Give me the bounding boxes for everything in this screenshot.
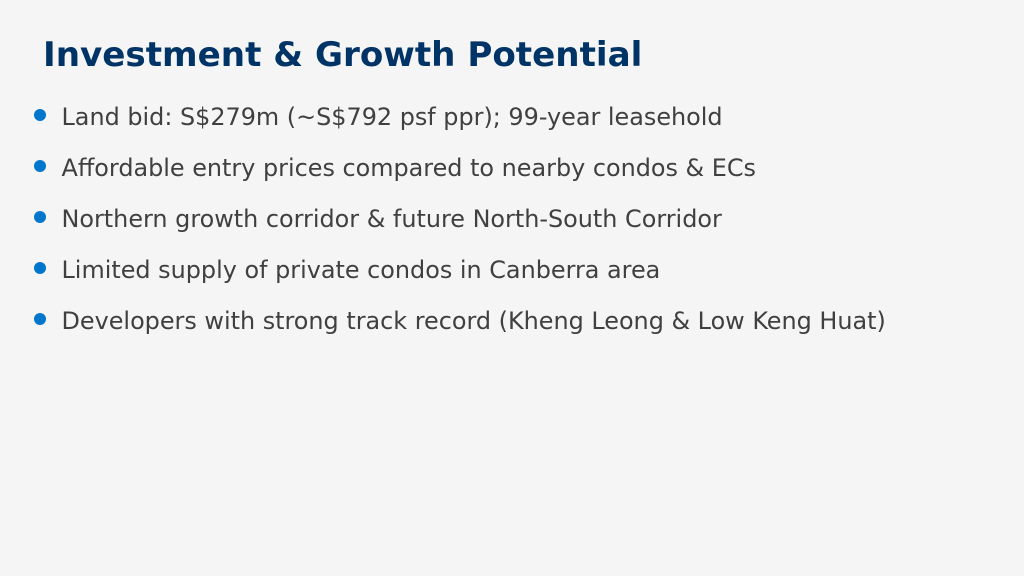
bullet: developers: Developers with strong track record (Kheng Leong & Low Keng Huat)	[62, 307, 886, 335]
bullet: land bid: Land bid: S$279m (~S$792 psf ppr); 99-year leasehold	[62, 103, 723, 131]
bullet: growth corridor: Northern growth corridor & future North-South Corridor	[62, 205, 722, 233]
bullet list	[34, 103, 886, 335]
bullet: limited supply: Limited supply of private condos in Canberra area	[62, 256, 660, 284]
title: Investment & Growth Potential	[43, 35, 642, 75]
bullet: entry prices: Affordable entry prices compared to nearby condos & ECs	[62, 154, 756, 182]
